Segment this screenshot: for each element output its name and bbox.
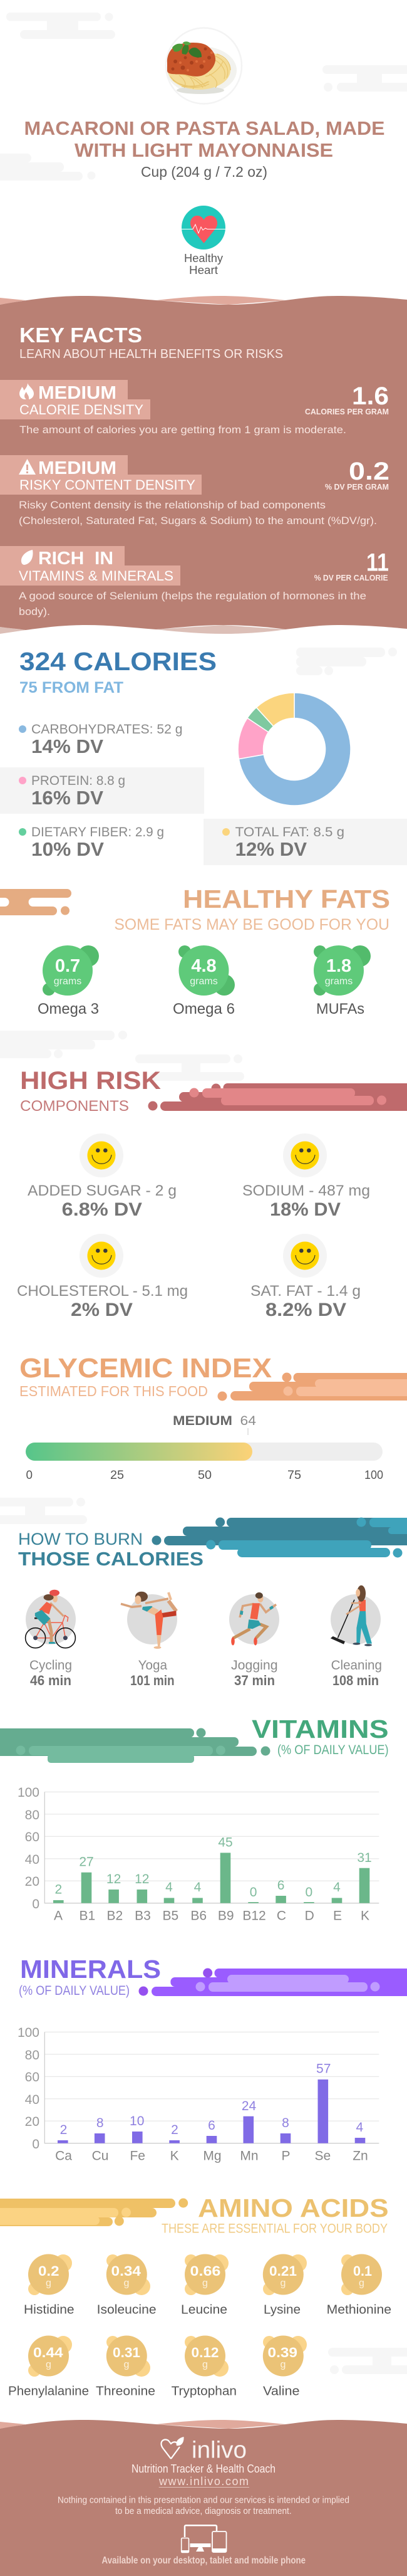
risk item: sodium bbox=[242, 1133, 370, 1220]
description: (Cholesterol, Saturated Fat, Sugars & Sodium) to the amount (%DV/gr). bbox=[19, 515, 377, 527]
stat: omega 6: grams bbox=[190, 976, 218, 987]
bar chart: minerals: 2 bbox=[171, 2123, 178, 2137]
subheading: minerals percent of daily value: (% OF DAILY VALUE) bbox=[19, 1984, 130, 1998]
healthy heart label: Heart bbox=[189, 264, 218, 276]
bar chart: vitamins: 40 bbox=[25, 1853, 39, 1867]
section decoration: burn calories bbox=[152, 1517, 407, 1557]
subheading: glycemic index: ESTIMATED FOR THIS FOOD bbox=[19, 1383, 208, 1399]
description: The amount of calories you are getting from 1 gram is moderate. bbox=[19, 424, 346, 436]
bar chart: minerals: Mn bbox=[240, 2149, 259, 2163]
stat: omega 3 bbox=[38, 945, 99, 1017]
legend: protein: 16% DV bbox=[31, 787, 103, 809]
icon: cyclist bbox=[26, 1590, 75, 1648]
label: vitamins and minerals: VITAMINS & MINERALS bbox=[19, 568, 173, 584]
bar chart: vitamins: 6 bbox=[277, 1878, 284, 1893]
bar chart: vitamins: 27 bbox=[79, 1855, 94, 1869]
panel: footer bbox=[0, 2420, 407, 2576]
risk item: added sugar: ADDED SUGAR - 2 g bbox=[28, 1182, 177, 1199]
stat: omega 3: 0.7 bbox=[55, 956, 80, 976]
stat: leucine bbox=[181, 2254, 229, 2317]
stat: omega 3: Omega 3 bbox=[38, 1001, 99, 1017]
bar chart: vitamins: K bbox=[361, 1909, 369, 1923]
gauge: glycemic index value: 75 bbox=[287, 1469, 301, 1482]
fact: risky content density bbox=[0, 455, 389, 527]
bar chart: vitamins: 45 bbox=[218, 1836, 233, 1850]
stat: tryptophan bbox=[172, 2336, 237, 2399]
risk item: sodium: 18% DV bbox=[270, 1199, 341, 1220]
gauge: glycemic index value: MEDIUM bbox=[173, 1414, 232, 1428]
heading: how to burn those calories: THOSE CALORIES bbox=[18, 1548, 204, 1570]
gauge: glycemic index value: 50 bbox=[198, 1469, 212, 1482]
section decoration: vitamins bbox=[0, 1728, 270, 1763]
bar chart: vitamins: C bbox=[277, 1909, 286, 1923]
icon: inlivo heart logo bbox=[161, 2437, 184, 2459]
risk item: saturated fat: 8.2% DV bbox=[265, 1300, 346, 1320]
stat: isoleucine bbox=[97, 2254, 157, 2317]
risk item: cholesterol bbox=[17, 1234, 188, 1320]
bar chart: minerals: 0 bbox=[32, 2137, 39, 2152]
description bbox=[19, 590, 366, 618]
description bbox=[19, 499, 377, 527]
logo wordmark: inlivo bbox=[192, 2437, 247, 2464]
bar chart: minerals: Fe bbox=[130, 2149, 145, 2163]
legend: total fat: TOTAL FAT: 8.5 g bbox=[235, 825, 344, 839]
section decoration: glycemic index bbox=[218, 1373, 407, 1401]
bar chart: vitamins: B2 bbox=[106, 1909, 123, 1923]
bar chart: vitamins: 80 bbox=[25, 1808, 39, 1822]
stat: mufas: grams bbox=[325, 976, 353, 987]
icon: food photo of pasta with sauce bbox=[166, 28, 242, 104]
stat: leucine: Leucine bbox=[181, 2303, 227, 2317]
icon: healthy heart badge bbox=[182, 206, 225, 250]
legend: protein: PROTEIN: 8.8 g bbox=[31, 774, 125, 788]
stat: omega 6 bbox=[173, 945, 235, 1017]
label: medium: MEDIUM bbox=[38, 458, 116, 478]
bar chart: minerals: 8 bbox=[96, 2116, 104, 2130]
label: calorie density: CALORIE DENSITY bbox=[19, 402, 143, 418]
activity: cycling: 46 min bbox=[30, 1673, 71, 1688]
label: medium: MEDIUM bbox=[38, 383, 116, 403]
stat: phenylalanine: Phenylalanine bbox=[8, 2385, 89, 2399]
website link: www.inlivo.com bbox=[158, 2475, 249, 2488]
gauge: glycemic index value: 25 bbox=[110, 1469, 124, 1482]
stat: phenylalanine bbox=[8, 2336, 89, 2399]
bar chart: minerals: Se bbox=[315, 2149, 331, 2163]
stat: isoleucine: 0.34 bbox=[111, 2263, 142, 2279]
stat: histidine bbox=[24, 2254, 75, 2317]
bar chart: vitamins: B6 bbox=[190, 1909, 207, 1923]
heading: calories: 324 CALORIES bbox=[19, 647, 217, 676]
stat: tryptophan: g bbox=[202, 2360, 208, 2370]
stat: isoleucine: Isoleucine bbox=[97, 2303, 157, 2317]
stat: mufas bbox=[314, 945, 371, 1017]
section decoration: amino acids bbox=[0, 2198, 188, 2226]
stat: isoleucine: g bbox=[124, 2278, 129, 2289]
bar chart: vitamins: 4 bbox=[165, 1880, 173, 1895]
subheading: components: COMPONENTS bbox=[20, 1098, 129, 1115]
bar chart: vitamins: 0 bbox=[250, 1885, 257, 1900]
stat: phenylalanine: 0.44 bbox=[33, 2345, 64, 2360]
activity: yoga bbox=[121, 1592, 177, 1688]
label: risky content density: RISKY CONTENT DENSITY bbox=[19, 477, 195, 493]
stat: tryptophan: Tryptophan bbox=[172, 2385, 237, 2399]
stat: mufas: 1.8 bbox=[326, 956, 351, 976]
stat: methionine: 0.1 bbox=[353, 2263, 372, 2279]
section decoration: high risk bbox=[148, 1083, 407, 1111]
bar chart: minerals: Mg bbox=[203, 2149, 222, 2163]
activity: yoga: 101 min bbox=[130, 1673, 175, 1688]
bar chart: vitamins: A bbox=[54, 1909, 63, 1923]
icon: person sweeping bbox=[331, 1585, 372, 1646]
stat: threonine: 0.31 bbox=[113, 2345, 140, 2360]
legend: carbohydrates: 14% DV bbox=[31, 735, 103, 757]
bar chart: minerals: 57 bbox=[316, 2062, 331, 2076]
bar chart: minerals: 24 bbox=[242, 2099, 256, 2113]
stat: threonine: Threonine bbox=[96, 2385, 155, 2399]
subheading: key facts: LEARN ABOUT HEALTH BENEFITS OR RISKS bbox=[19, 347, 283, 361]
activity: cycling bbox=[26, 1590, 76, 1688]
activity: jogging: Jogging bbox=[231, 1658, 278, 1673]
bar chart: minerals: 60 bbox=[25, 2070, 39, 2084]
stat: leucine: 0.66 bbox=[190, 2263, 220, 2279]
risk item: cholesterol: 2% DV bbox=[71, 1300, 133, 1320]
bar chart: vitamins: 100 bbox=[18, 1785, 39, 1800]
bar chart: vitamins bbox=[18, 1785, 379, 1923]
gauge: glycemic index value: 64 bbox=[240, 1414, 256, 1428]
disclaimer: Nothing contained in this presentation and our services is intended or implied bbox=[58, 2496, 349, 2506]
bar chart: minerals bbox=[18, 2026, 379, 2163]
stat: mufas: MUFAs bbox=[316, 1001, 364, 1017]
bar chart: minerals: 20 bbox=[25, 2115, 39, 2129]
stat: valine: g bbox=[281, 2360, 286, 2370]
stat: omega 6: Omega 6 bbox=[173, 1001, 235, 1017]
legend: carbohydrates: CARBOHYDRATES: 52 g bbox=[31, 722, 183, 737]
risk item: added sugar bbox=[28, 1133, 177, 1220]
bar chart: minerals: 100 bbox=[18, 2026, 39, 2040]
stat: tryptophan: 0.12 bbox=[192, 2345, 219, 2360]
stat: methionine: Methionine bbox=[327, 2303, 391, 2317]
label: rich in: RICH IN bbox=[38, 549, 113, 569]
stat: valine bbox=[263, 2336, 307, 2399]
risk item: cholesterol: CHOLESTEROL - 5.1 mg bbox=[17, 1283, 188, 1300]
risk item: sodium: SODIUM - 487 mg bbox=[242, 1182, 370, 1199]
risk item: saturated fat bbox=[250, 1234, 361, 1320]
activity: cleaning: Cleaning bbox=[331, 1658, 382, 1673]
stat: phenylalanine: g bbox=[46, 2360, 51, 2370]
bar chart: minerals: 2 bbox=[60, 2123, 67, 2137]
availability note: Available on your desktop, tablet and mobile phone bbox=[101, 2555, 306, 2566]
icon: warning triangle bbox=[19, 459, 36, 475]
bar chart: vitamins: 4 bbox=[333, 1880, 341, 1895]
bar chart: vitamins: 4 bbox=[194, 1880, 202, 1895]
value: 0.2: 0.2 bbox=[349, 458, 389, 485]
stat: lysine: g bbox=[281, 2278, 286, 2289]
heading: high risk: HIGH RISK bbox=[20, 1067, 161, 1095]
value: 11: 11 bbox=[366, 549, 389, 577]
bar chart: vitamins: 20 bbox=[25, 1874, 39, 1889]
bar chart: vitamins: B12 bbox=[242, 1909, 266, 1923]
subheading: vitamins percent of daily value: (% OF DAILY VALUE) bbox=[277, 1743, 389, 1757]
heading: glycemic index: GLYCEMIC INDEX bbox=[19, 1353, 272, 1384]
bar chart: minerals: 4 bbox=[356, 2120, 364, 2135]
bar chart: vitamins: 0 bbox=[32, 1897, 39, 1911]
panel: key facts bbox=[0, 296, 407, 634]
legend: dietary fiber: DIETARY FIBER: 2.9 g bbox=[31, 825, 164, 839]
subheading: healthy fats: SOME FATS MAY BE GOOD FOR YOU bbox=[114, 916, 389, 933]
healthy heart label: Healthy bbox=[184, 252, 223, 265]
stat: leucine: g bbox=[202, 2278, 208, 2289]
risk item: added sugar: 6.8% DV bbox=[62, 1199, 142, 1220]
legend: protein bbox=[0, 767, 204, 814]
stat: omega 3: grams bbox=[54, 976, 81, 987]
icon: leaf bbox=[21, 550, 33, 565]
bar chart: vitamins: 2 bbox=[54, 1883, 62, 1897]
gauge: glycemic index value: 0 bbox=[26, 1469, 33, 1482]
legend: dietary fiber bbox=[19, 825, 164, 860]
activity: cleaning: 108 min bbox=[332, 1673, 379, 1688]
gauge: glycemic index value: 100 bbox=[364, 1469, 383, 1482]
bar chart: vitamins: D bbox=[305, 1909, 314, 1923]
subheading: calories from fat: 75 FROM FAT bbox=[19, 679, 123, 697]
disclaimer bbox=[58, 2496, 349, 2516]
heading: key facts: KEY FACTS bbox=[19, 323, 142, 347]
bar chart: minerals: Cu bbox=[92, 2149, 108, 2163]
disclaimer: to be a medical advice, diagnosis or treatment. bbox=[115, 2506, 292, 2516]
bar chart: vitamins: B9 bbox=[218, 1909, 234, 1923]
section decoration: healthy fats bbox=[0, 889, 71, 915]
risk item: saturated fat: SAT. FAT - 1.4 g bbox=[250, 1283, 361, 1300]
stat: lysine: Lysine bbox=[264, 2303, 301, 2317]
bar chart: vitamins: 0 bbox=[306, 1885, 312, 1900]
bar chart: minerals: Zn bbox=[353, 2149, 368, 2163]
legend: carbohydrates bbox=[19, 722, 183, 757]
heading: vitamins: VITAMINS bbox=[252, 1715, 389, 1743]
activity: cleaning bbox=[331, 1585, 382, 1688]
heading: healthy fats: HEALTHY FATS bbox=[183, 885, 390, 913]
bar chart: minerals: 10 bbox=[130, 2114, 144, 2128]
bar chart: vitamins: B1 bbox=[79, 1909, 95, 1923]
title bbox=[24, 118, 384, 161]
bar chart: vitamins: B5 bbox=[163, 1909, 178, 1923]
stat: omega 6: 4.8 bbox=[191, 956, 217, 976]
donut chart: macronutrients bbox=[238, 693, 351, 806]
stat: valine: Valine bbox=[263, 2385, 299, 2399]
bar chart: minerals: Ca bbox=[55, 2149, 72, 2163]
activity: cycling: Cycling bbox=[29, 1658, 72, 1673]
bar chart: minerals: K bbox=[170, 2149, 179, 2163]
stat: histidine: 0.2 bbox=[38, 2263, 59, 2279]
healthy heart label bbox=[184, 252, 223, 276]
icon: runner bbox=[231, 1592, 276, 1645]
bar chart: vitamins: E bbox=[333, 1909, 342, 1923]
title: WITH LIGHT MAYONNAISE bbox=[75, 140, 333, 161]
description: A good source of Selenium (helps the regulation of hormones in the bbox=[19, 590, 366, 602]
heading: amino acids: AMINO ACIDS bbox=[198, 2194, 389, 2222]
bar chart: minerals: 80 bbox=[25, 2048, 39, 2063]
title: MACARONI OR PASTA SALAD, MADE bbox=[24, 118, 384, 139]
unit: calories per gram: CALORIES PER GRAM bbox=[305, 407, 389, 416]
stat: threonine bbox=[96, 2336, 155, 2399]
heading: minerals: MINERALS bbox=[20, 1955, 161, 1984]
value: 1.6: 1.6 bbox=[352, 382, 389, 410]
heading: how to burn those calories: HOW TO BURN bbox=[18, 1530, 143, 1548]
bar chart: vitamins: 12 bbox=[106, 1872, 121, 1886]
activity: yoga: Yoga bbox=[138, 1658, 167, 1673]
stat: lysine bbox=[263, 2254, 307, 2317]
bar chart: minerals: 40 bbox=[25, 2093, 39, 2107]
stat: methionine: g bbox=[359, 2278, 364, 2289]
serving size subtitle: Cup (204 g / 7.2 oz) bbox=[141, 164, 267, 180]
bar chart: vitamins: 12 bbox=[135, 1872, 149, 1886]
gauge: glycemic index value bbox=[26, 1414, 383, 1482]
stat: threonine: g bbox=[124, 2360, 129, 2370]
stat: histidine: Histidine bbox=[24, 2303, 75, 2317]
stat: valine: 0.39 bbox=[268, 2345, 297, 2360]
bar chart: minerals: 6 bbox=[208, 2118, 215, 2133]
fact: rich in vitamins and minerals bbox=[0, 546, 389, 618]
bar chart: vitamins: B3 bbox=[135, 1909, 151, 1923]
bar chart: vitamins: 60 bbox=[25, 1830, 39, 1844]
bar chart: minerals: 8 bbox=[282, 2116, 289, 2130]
unit: percent dv per calorie: % DV PER CALORIE bbox=[314, 574, 388, 582]
heading: how to burn those calories bbox=[18, 1530, 204, 1570]
icon: desktop, tablet and phone bbox=[182, 2525, 227, 2553]
bar chart: vitamins: 31 bbox=[357, 1851, 372, 1865]
section decoration: minerals bbox=[139, 1969, 407, 1996]
stat: histidine: g bbox=[46, 2278, 51, 2289]
icon: flame bbox=[19, 383, 34, 399]
tagline: Nutrition Tracker & Health Coach bbox=[131, 2462, 276, 2475]
legend: total fat: 12% DV bbox=[235, 838, 307, 860]
unit: percent dv per gram: % DV PER GRAM bbox=[325, 483, 389, 492]
stat: lysine: 0.21 bbox=[269, 2263, 297, 2279]
fact: calorie density bbox=[0, 380, 389, 436]
bar chart: minerals: P bbox=[281, 2149, 291, 2163]
description: Risky Content density is the relationship of bad components bbox=[19, 499, 326, 511]
stat: methionine bbox=[327, 2254, 391, 2317]
legend: total fat bbox=[204, 819, 407, 865]
icon: yoga pose bbox=[121, 1592, 177, 1649]
activity: jogging bbox=[229, 1592, 279, 1688]
legend: dietary fiber: 10% DV bbox=[31, 838, 104, 860]
description: body). bbox=[19, 606, 50, 618]
activity: jogging: 37 min bbox=[234, 1673, 275, 1688]
